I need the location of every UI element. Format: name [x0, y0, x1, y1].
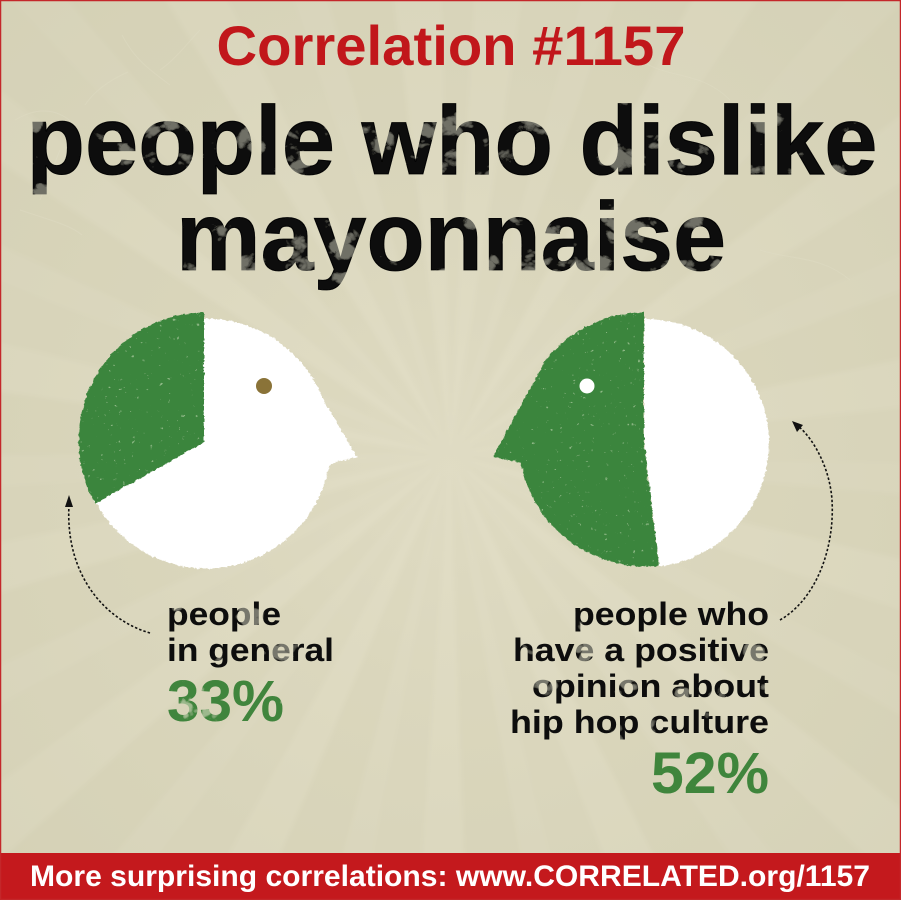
headline: people who dislike: [26, 86, 878, 195]
label: hip hop fans: hip hop culture: [510, 704, 769, 740]
pie head: people in general: [79, 312, 357, 568]
white head with nose: [81, 318, 357, 568]
label: hip hop fans: people who: [573, 596, 769, 632]
eye: [256, 378, 272, 394]
white half: [644, 319, 769, 566]
right arrow: [780, 421, 832, 620]
value 33 percent: 33%: [167, 669, 284, 734]
eye: [580, 378, 594, 394]
value 52 percent: 52%: [651, 741, 769, 806]
left arrow: [65, 495, 150, 633]
label: hip hop fans: [510, 596, 769, 740]
label: people in general: in general: [167, 632, 334, 668]
supertitle: Correlation #1157: [216, 14, 686, 77]
footer band: [0, 853, 901, 900]
scratches on background: [15, 30, 850, 280]
label: people in general: people: [167, 596, 281, 632]
label: hip hop fans: opinion about: [532, 668, 769, 704]
headline: [26, 86, 878, 291]
headline: mayonnaise: [176, 182, 726, 291]
label: hip hop fans: have a positive: [513, 632, 769, 668]
green slice 52 percent with nose: [493, 312, 659, 566]
green slice 33 percent: [79, 312, 204, 504]
pie head: hip hop fans: [493, 312, 769, 566]
footer text: More surprising correlations: www.CORRELATED.org/1157: [30, 860, 870, 893]
label: people in general: [167, 596, 334, 668]
